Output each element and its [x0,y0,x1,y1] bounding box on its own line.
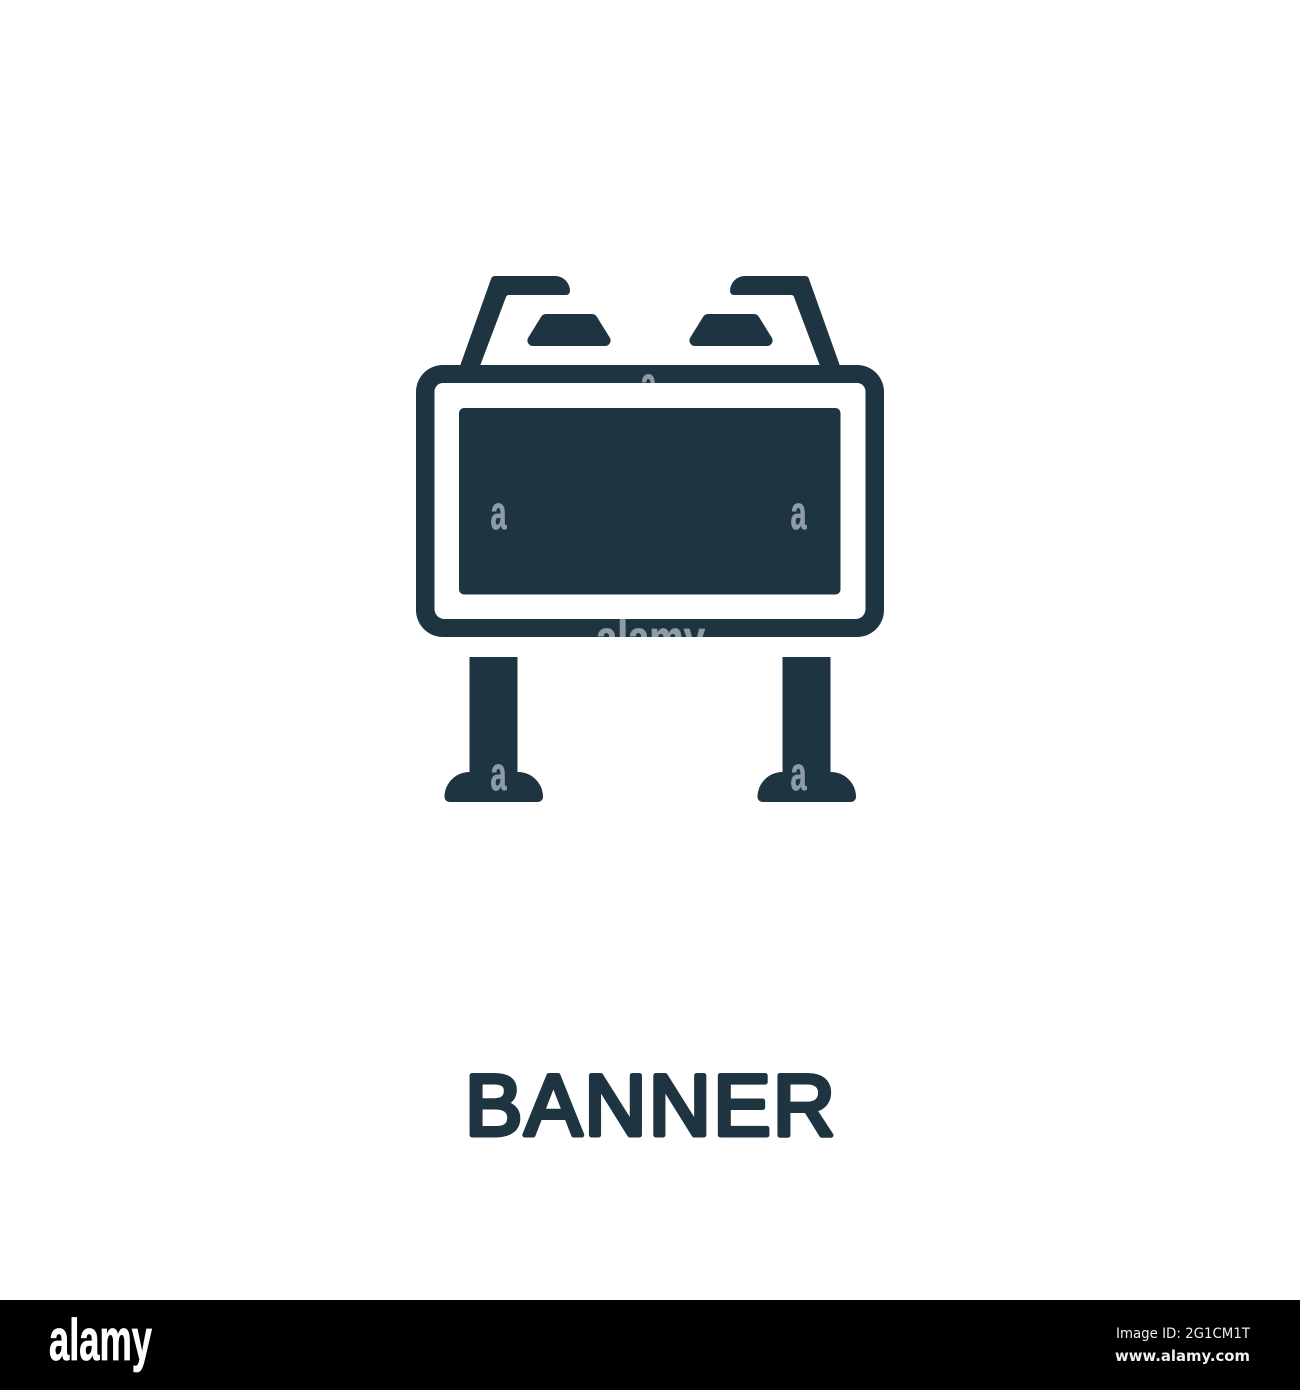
watermark letters: a [790,747,807,800]
watermark letters [490,357,807,800]
left support arm [460,276,570,366]
right leg [758,657,856,802]
banner frame [416,365,884,637]
watermark letters: a [490,486,507,539]
right support arm [730,276,840,366]
watermark letters: a [790,486,807,539]
watermark letters: a [640,357,657,410]
icon: banner sign [416,276,884,802]
website: www.alamy.com [1115,1347,1250,1365]
watermark letters: alamy [596,611,705,664]
footer logo: alamy [49,1308,152,1373]
banner panel [459,408,840,594]
title: BANNER: BANNER [465,1058,835,1154]
footer bar [0,1300,1300,1390]
watermark letters: a [490,747,507,800]
left lamp [527,314,611,346]
right lamp [689,314,773,346]
left leg [444,657,543,802]
image id: Image ID: 2G1CM1T [1116,1326,1250,1342]
